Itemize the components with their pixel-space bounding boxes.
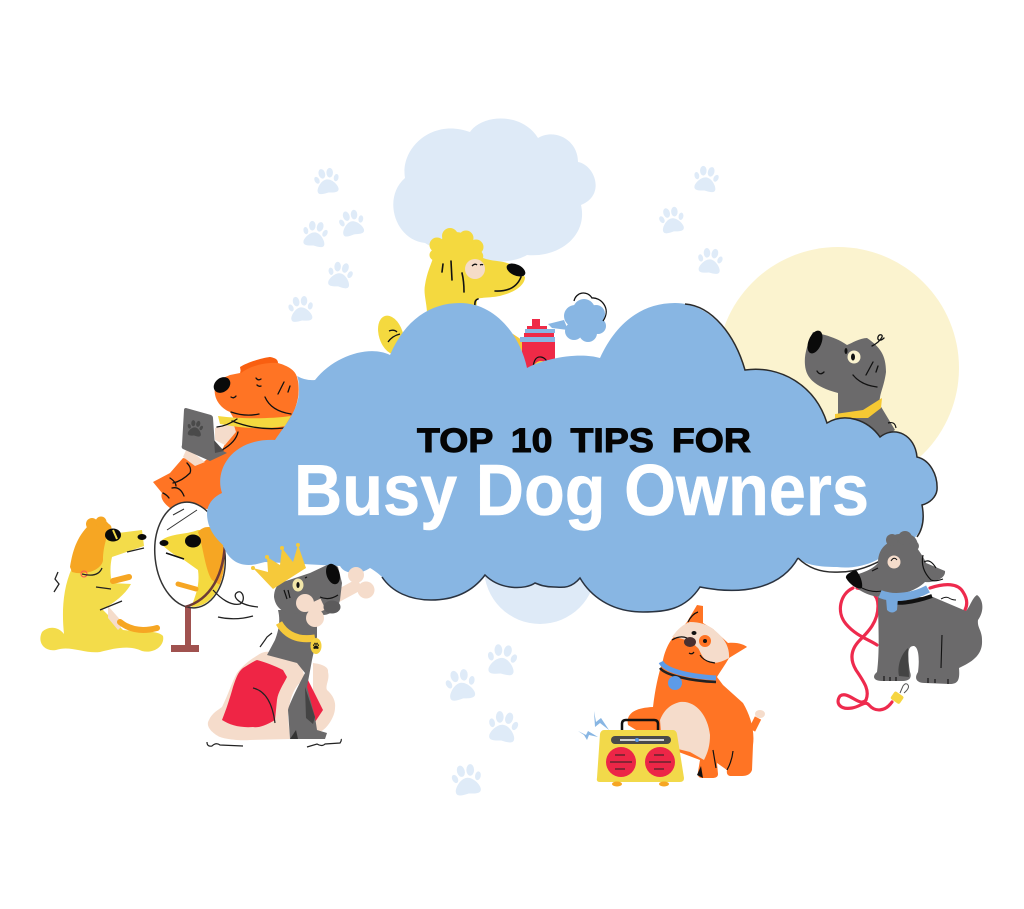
body — [267, 610, 327, 739]
radio boombox — [578, 711, 684, 786]
spray can with puff — [510, 293, 606, 377]
cape — [313, 663, 335, 732]
dog: yellow poodle behind cloud — [373, 228, 527, 358]
dog: orange corgi — [628, 605, 765, 778]
crown — [253, 545, 306, 589]
mirror with reflection — [150, 499, 258, 652]
right bone end — [334, 584, 360, 598]
dog: yellow dog with sunglasses — [40, 516, 163, 652]
pale yellow sun circle — [717, 247, 959, 489]
dog: grey poodle with red leash — [838, 531, 982, 710]
heading: top 10 tips for: TOP 10 TIPS FOR — [417, 422, 751, 460]
title — [294, 422, 869, 531]
paw prints — [286, 164, 725, 797]
dog: grey king dog with crown, cape and bone — [207, 543, 374, 747]
main blue cloud — [207, 303, 937, 612]
background pale cloud (bottom) — [484, 512, 596, 624]
dog: orange dog with laptop behind cloud — [153, 357, 300, 510]
collar and tag — [279, 623, 315, 639]
head — [274, 565, 342, 615]
left bone end — [308, 604, 323, 611]
heading: busy dog owners: Busy Dog Owners — [294, 451, 869, 531]
background pale cloud (top) — [393, 118, 596, 262]
lightning marks — [578, 711, 609, 740]
dog: grey dog looking up at the sun — [804, 328, 896, 440]
cloud outline strokes — [382, 304, 937, 612]
